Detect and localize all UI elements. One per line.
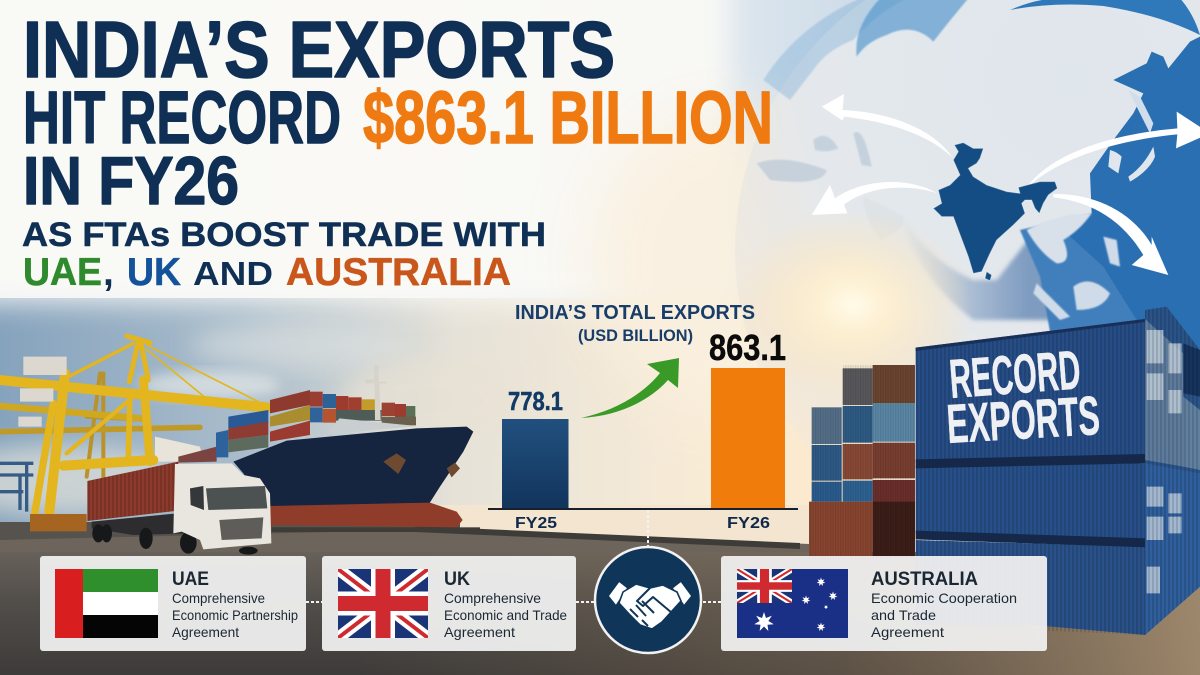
export arrows: [812, 94, 1200, 275]
flag: Australia: [737, 569, 848, 638]
ocean: arctic band: [1010, 0, 1200, 35]
subtitle line 2: AND: [193, 255, 273, 292]
title line 2: [23, 76, 773, 159]
label: FY25: FY25: [515, 515, 557, 532]
port scene: [0, 336, 480, 555]
deck: [328, 418, 417, 434]
sun glow: [733, 210, 973, 400]
side window: [190, 486, 204, 510]
chart unit: (USD BILLION): [578, 326, 693, 345]
UAE text: [172, 569, 298, 640]
UK text: Economic and Trade: [444, 607, 567, 623]
ship waterline: [270, 503, 463, 527]
axis: [488, 508, 798, 510]
Australia text: Economic Cooperation: [871, 590, 1017, 606]
land: kamchatka coast: [1128, 90, 1153, 133]
title block: [22, 5, 773, 294]
bar: FY26: [711, 368, 785, 509]
india map: [933, 143, 1057, 281]
title line 3: IN FY26: [23, 143, 239, 219]
UK text: [444, 569, 567, 640]
ship mast: [365, 365, 387, 420]
subtitle line 2: UAE: [23, 251, 102, 294]
card: Australia: [721, 556, 1047, 651]
container corrugation: [916, 319, 1145, 635]
Australia text: [871, 569, 1017, 640]
container stacks: [809, 307, 1200, 635]
growth arrow: [581, 358, 679, 418]
cab: [173, 463, 271, 549]
connectors: [306, 510, 722, 602]
land: korea and japan: [1108, 147, 1155, 182]
ship containers: [178, 390, 416, 463]
subtitle line 2: ,: [103, 251, 114, 294]
flag: UAE: [55, 569, 158, 638]
land: indochina: [1027, 213, 1092, 263]
chart title: INDIA’S TOTAL EXPORTS: [515, 302, 755, 324]
container crane: [0, 336, 267, 512]
handshake badge: [595, 547, 701, 653]
value: FY25: 778.1: [508, 386, 563, 416]
UAE text: Agreement: [172, 624, 239, 640]
front container top: [916, 319, 1145, 463]
UAE text: UAE: [172, 569, 209, 590]
ship bridge: [155, 437, 203, 462]
subtitle line 2: [23, 251, 511, 294]
Australia text: Agreement: [871, 624, 944, 640]
ocean: south east asian seas: [1020, 213, 1160, 350]
trailer: [87, 462, 178, 521]
UK text: Agreement: [444, 624, 515, 640]
title line 2: $863.1 BILLION: [363, 76, 773, 159]
harbour ground: [0, 505, 1200, 675]
container label: record exports: [945, 338, 1101, 455]
UK text: Comprehensive: [444, 590, 541, 606]
ocean: indian ocean shading: [900, 217, 1153, 320]
UK text: UK: [444, 569, 470, 590]
land: arabia and africa: [863, 197, 904, 240]
subtitle line 1: AS FTAs BOOST TRADE WITH: [22, 216, 546, 254]
title line 2: HIT RECORD: [23, 76, 341, 159]
rear back stacks: [809, 365, 915, 558]
windshield: [206, 486, 267, 510]
label: FY26: FY26: [727, 515, 770, 532]
siberian coast: [856, 0, 968, 57]
arctic rim, faint left: [763, 0, 907, 100]
front container bottom: [916, 540, 1145, 635]
arrow: to europe: [822, 94, 952, 157]
bar: FY25: [502, 419, 568, 509]
land: south east asia islands: [1033, 237, 1120, 320]
anchor: [383, 453, 460, 477]
Australia text: AUSTRALIA: [871, 569, 978, 590]
ocean: pacific: [1067, 37, 1200, 400]
value: FY26: 863.1: [709, 327, 786, 368]
ship hull: [233, 427, 473, 515]
subtitle line 2: UK: [127, 251, 181, 294]
wheels: [92, 524, 258, 555]
container rails: [916, 454, 1145, 547]
arrow: to east asia: [1026, 112, 1200, 188]
UAE text: Comprehensive: [172, 590, 265, 606]
bar chart: India's total exports: [488, 302, 798, 532]
dockside crates: [30, 514, 87, 531]
card: UAE: [40, 556, 306, 651]
front container middle: [916, 463, 1145, 542]
side of containers: [1145, 307, 1200, 635]
container label: record exports: RECORD: [947, 338, 1083, 410]
card: UK: [322, 556, 576, 651]
truck: [87, 462, 271, 555]
flag: UK: [338, 569, 428, 638]
land: mediterranean: [757, 132, 872, 182]
arrow: to south east asia: [1053, 194, 1168, 275]
background blue crane: [0, 462, 33, 512]
grille: [219, 517, 263, 540]
UAE text: Economic Partnership: [172, 607, 298, 623]
crane cabins: [18, 357, 67, 427]
title line 1: INDIA’S EXPORTS: [23, 5, 615, 94]
Australia text: and Trade: [871, 607, 936, 623]
chassis: [92, 513, 187, 535]
dock edge: [272, 527, 480, 532]
arrow: to middle east: [812, 182, 937, 215]
icon: handshake: [608, 581, 692, 629]
globe with world map: [735, 0, 1200, 555]
background: sky, haze and sun: [0, 0, 1200, 540]
subtitle line 2: AUSTRALIA: [286, 251, 511, 294]
